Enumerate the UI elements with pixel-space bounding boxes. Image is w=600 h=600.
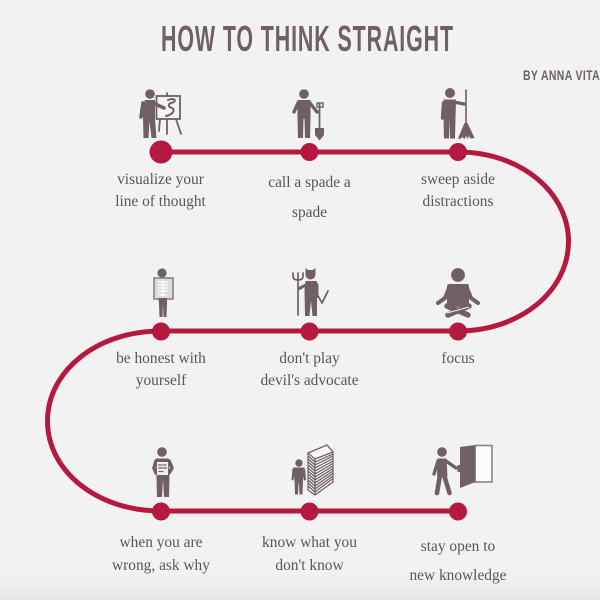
label: be honest with yourself: be honest with [116,350,206,367]
label: sweep aside distractions: sweep aside [421,171,495,188]
icon: meditating person [438,268,478,315]
label: when you are wrong, ask why: when you are [120,534,202,551]
label: sweep aside distractions: distractions [423,193,493,210]
label: visualize your line of thought: line of thought [115,193,207,210]
icon: person at open door [434,445,492,493]
label: when you are wrong, ask why: wrong, ask why [112,557,210,574]
label: stay open to new knowledge: new knowledge [409,567,507,584]
label: know what you don't know: know what you [262,534,357,551]
label: focus: focus [441,350,475,367]
icon: person beside stack of books [292,445,333,495]
label: call a spade a spade: call a spade a [268,174,351,191]
icon: person with broom [442,88,474,139]
icon: person with spade [294,89,324,140]
icon: person painting on easel [141,89,181,138]
label: don't play devil's advocate: devil's advocate [260,372,359,389]
path nodes [150,140,467,520]
icon: person with shirt text, wrong [154,447,172,497]
label: stay open to new knowledge: stay open to [421,538,495,555]
icon: x-ray person [154,268,173,317]
icon: devil with pitchfork [293,268,328,316]
label: don't play devil's advocate: don't play [279,350,340,367]
label: be honest with yourself: yourself [136,372,187,389]
label: visualize your line of thought: visualize your [117,171,204,188]
label: know what you don't know: don't know [275,557,344,574]
label: call a spade a spade: spade [292,204,327,221]
winding path [48,140,568,520]
